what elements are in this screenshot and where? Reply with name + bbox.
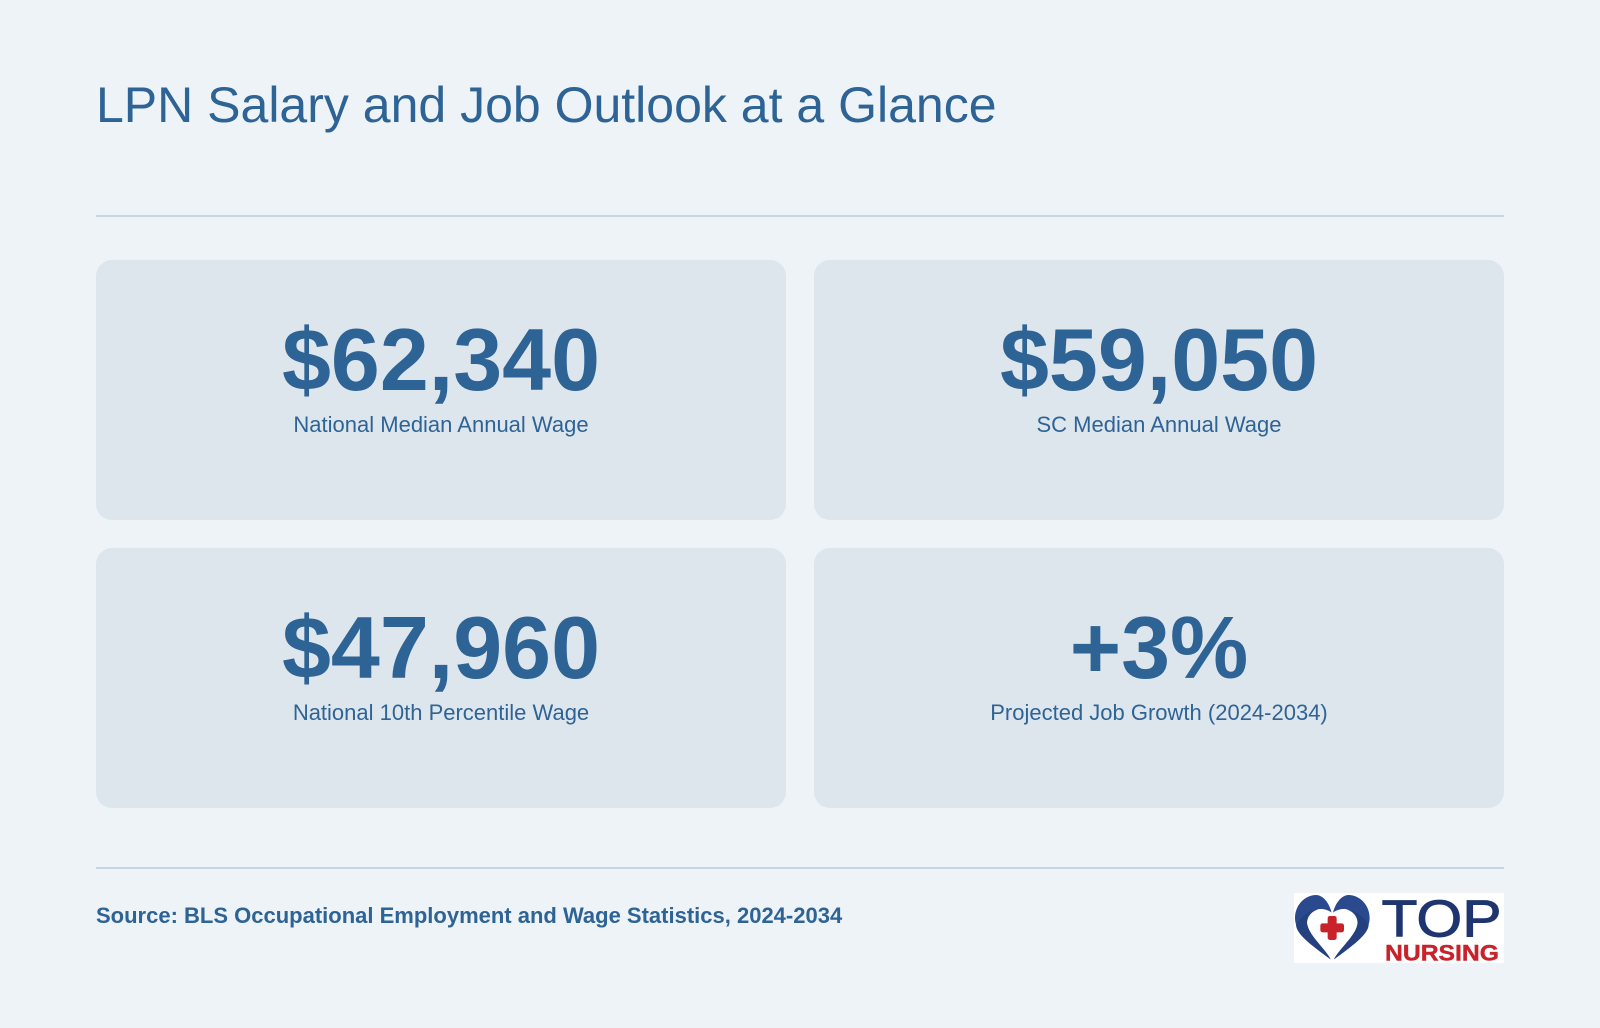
panel: projected job growth <box>814 548 1504 808</box>
stat label: Projected Job Growth (2024-2034) <box>990 700 1328 725</box>
icon: heart with cross <box>1295 895 1370 959</box>
stat label: National 10th Percentile Wage <box>293 700 589 725</box>
panel: national median wage <box>96 260 786 520</box>
source text: Source: BLS Occupational Employment and Wage Statistics, 2024-2034 <box>96 903 842 928</box>
wordmark <box>1382 890 1502 966</box>
stat value: $62,340 <box>282 310 600 409</box>
stat value: +3% <box>1070 598 1248 697</box>
stat value: $47,960 <box>282 598 600 697</box>
panel: SC median wage <box>814 260 1504 520</box>
stat value: $59,050 <box>1000 310 1318 409</box>
title: LPN Salary and Job Outlook at a Glance <box>96 77 997 133</box>
logo: Top Nursing <box>1294 893 1504 963</box>
panel: national 10th percentile wage <box>96 548 786 808</box>
stat label: National Median Annual Wage <box>293 412 589 437</box>
stat label: SC Median Annual Wage <box>1036 412 1282 437</box>
